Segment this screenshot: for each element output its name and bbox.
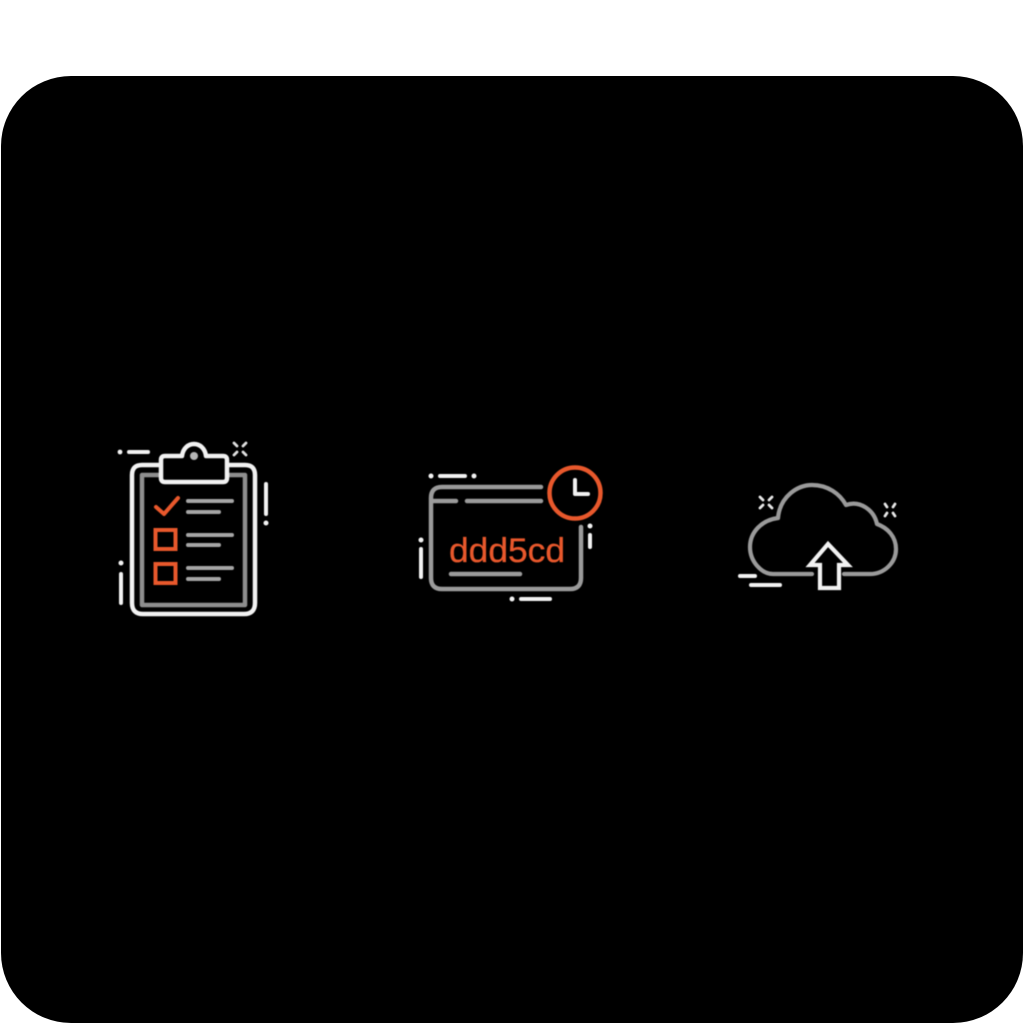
icon: clipboard checklist: [118, 443, 268, 614]
cloud outline: [750, 485, 896, 574]
checklist lines: [188, 501, 232, 579]
clock hands: [575, 480, 588, 494]
sparkle: [234, 443, 246, 455]
clipboard decorative dots: [118, 450, 268, 566]
window underline: [451, 572, 520, 576]
clipboard decorative marks: [121, 452, 266, 603]
speed lines: [740, 576, 780, 585]
window decorative marks: [421, 476, 590, 599]
orange checkbox 2: [156, 564, 176, 583]
clock ring: [550, 468, 600, 518]
orange check mark: [156, 498, 178, 514]
window text: ddd5cd: [449, 532, 565, 570]
orange checkbox 1: [156, 530, 176, 549]
clock: [550, 468, 600, 518]
clipboard inner sheet: [142, 475, 245, 605]
window title lines: [433, 499, 541, 503]
window decorative dots: [418, 474, 592, 602]
icon: cloud upload: [740, 485, 896, 588]
window frame: [431, 487, 581, 589]
clip hole: [190, 452, 198, 460]
icon: browser window with clock: [418, 468, 600, 602]
sparkle left: [760, 497, 772, 508]
upload arrow: [810, 544, 848, 588]
sparkle right: [885, 504, 895, 516]
clipboard clip: [161, 444, 227, 482]
clipboard outer board: [132, 465, 255, 614]
